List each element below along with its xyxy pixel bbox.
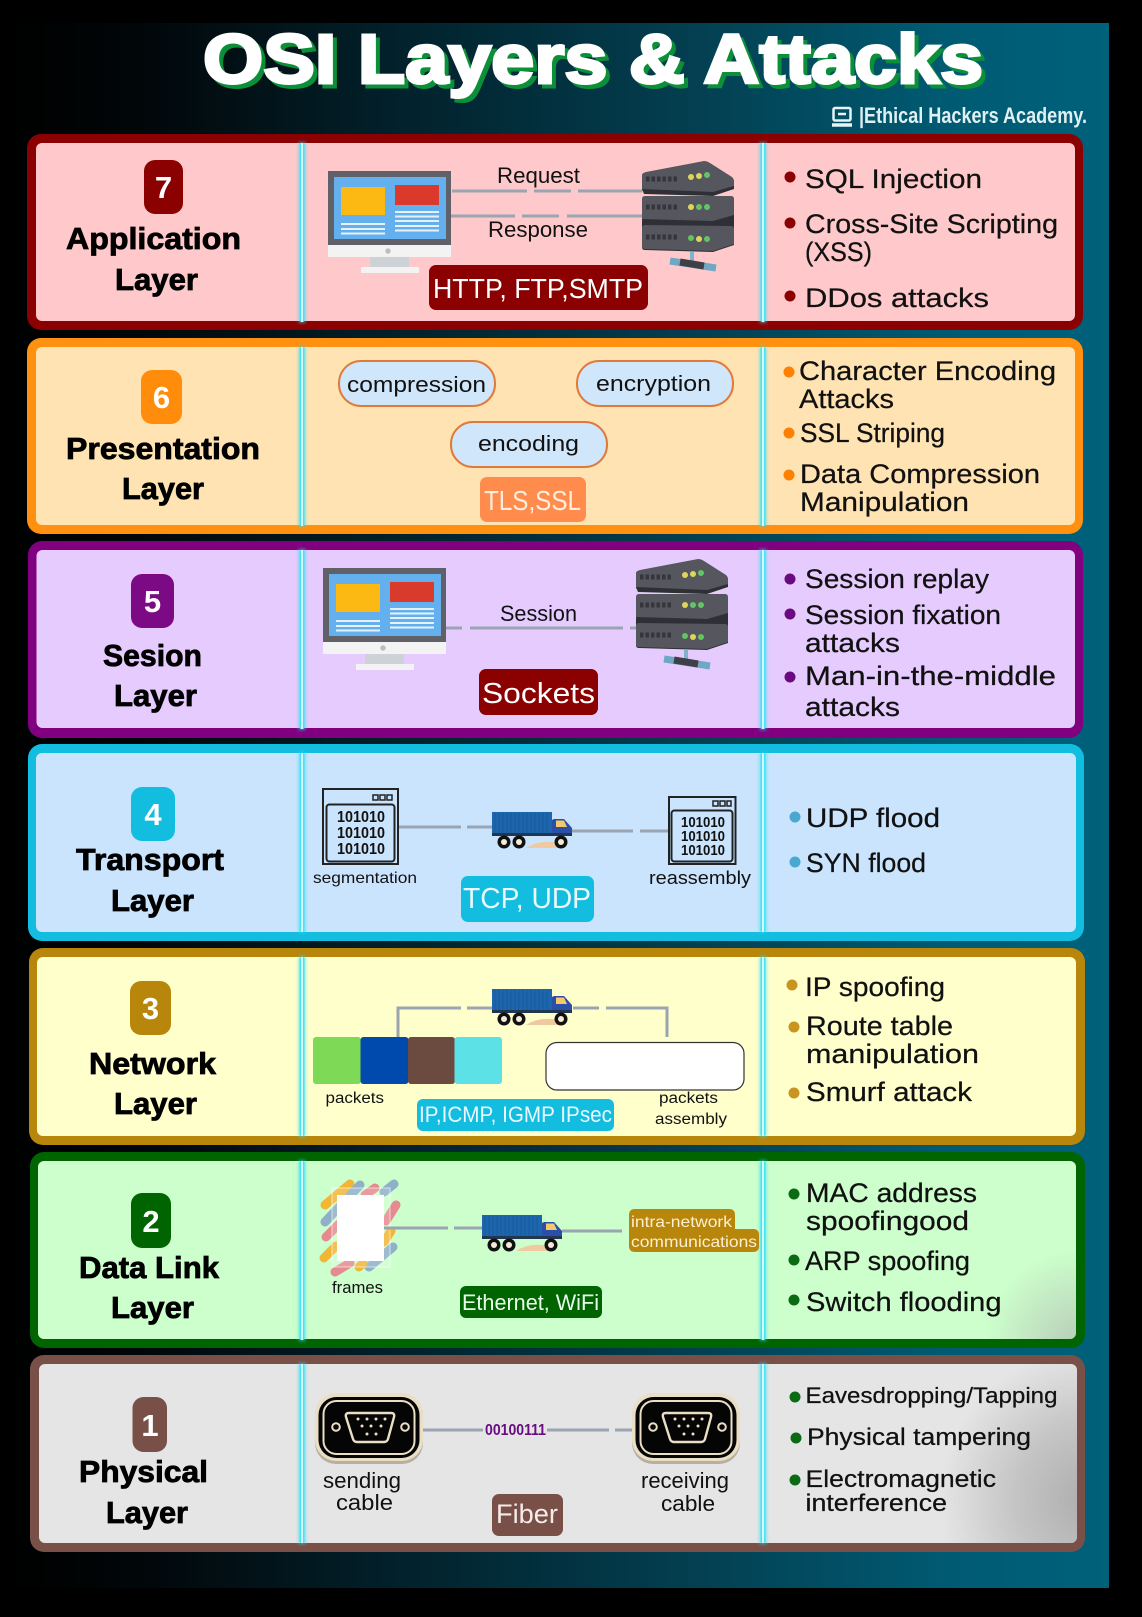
title: OSI Layers & Attacks <box>203 20 983 98</box>
intra-network tag: communications <box>631 1234 757 1251</box>
icon: laptop <box>832 108 852 125</box>
panel: layer 6 presentation <box>27 338 1083 534</box>
layer name: Layer <box>122 471 204 506</box>
layer name <box>89 1046 217 1121</box>
attacks list: SYN flood <box>806 848 926 878</box>
transport line <box>399 827 668 831</box>
attacks list: SQL Injection <box>805 164 982 194</box>
layer name <box>103 638 202 713</box>
attacks list: Route table <box>806 1011 953 1041</box>
badge 4 <box>131 787 175 841</box>
attacks list: DDos attacks <box>805 283 989 313</box>
panel body <box>36 143 1075 321</box>
panel: layer 2 data link <box>30 1152 1085 1348</box>
badge 6: 6 <box>153 380 170 415</box>
panel body <box>36 753 1076 932</box>
attacks list <box>784 564 1056 722</box>
attacks list: MAC address <box>806 1178 977 1208</box>
badge 3 <box>130 981 171 1035</box>
icon: monitor <box>328 171 451 273</box>
panel frame <box>30 1355 1085 1552</box>
diagram: data link <box>324 1184 759 1318</box>
frames label: frames <box>332 1279 383 1297</box>
panel: layer 4 transport <box>28 744 1084 941</box>
brand text: |Ethical Hackers Academy. <box>859 103 1087 128</box>
diagram: session <box>323 559 728 715</box>
layer name <box>79 1250 220 1325</box>
attacks list: Physical tampering <box>807 1424 1031 1451</box>
panel frame <box>27 338 1083 534</box>
attacks list: Electromagnetic <box>806 1466 996 1493</box>
attacks list: manipulation <box>806 1039 979 1069</box>
badge 5 <box>131 574 174 628</box>
bits label: 00100111 <box>485 1422 546 1439</box>
sending cable label <box>323 1468 401 1515</box>
icon: frames <box>324 1184 396 1272</box>
layer name: Layer <box>111 883 194 918</box>
icon: segmentation window: 101010 <box>337 825 385 842</box>
layer name: Transport <box>76 842 224 877</box>
protocol tag: Fiber <box>496 1499 558 1529</box>
icon: segmentation window <box>323 789 398 864</box>
attacks list: ARP spoofing <box>805 1246 970 1276</box>
panel body <box>39 1364 1077 1543</box>
routing line <box>398 1008 667 1037</box>
pill: compression: compression <box>347 372 486 397</box>
attacks list: Switch flooding <box>806 1287 1002 1317</box>
panel body <box>36 550 1075 728</box>
attacks list: Manipulation <box>800 487 969 517</box>
logo: Ethical Hackers Academy <box>832 103 1087 128</box>
icon: receiving connector <box>632 1393 740 1464</box>
link line <box>384 1228 622 1231</box>
packets <box>313 1037 502 1084</box>
attacks list: IP spoofing <box>805 972 945 1002</box>
icon: sending connector <box>315 1393 423 1464</box>
protocol tag: IP,ICMP, IGMP IPsec <box>419 1102 612 1127</box>
icon: truck <box>492 989 572 1026</box>
packets assembly box <box>546 1042 744 1090</box>
layer name <box>76 842 224 918</box>
icon: server <box>636 559 728 666</box>
badge 5: 5 <box>144 584 161 619</box>
diagram: transport <box>313 789 751 922</box>
protocol tag: Sockets <box>482 678 595 710</box>
protocol tag: HTTP, FTP,SMTP <box>433 273 643 304</box>
panel frame <box>30 1152 1085 1348</box>
icon: reassembly window: 101010 <box>681 814 725 831</box>
badge 1: 1 <box>141 1408 159 1443</box>
layer name: Layer <box>111 1290 194 1325</box>
response label: Response <box>488 217 588 242</box>
layer name: Application <box>66 221 241 256</box>
attacks list <box>784 356 1056 517</box>
panel frame <box>28 744 1084 941</box>
layer name <box>66 221 241 297</box>
icon: truck <box>492 812 572 848</box>
attacks list <box>786 972 979 1107</box>
protocol tag <box>480 477 586 522</box>
layer name <box>79 1454 208 1530</box>
protocol tag <box>492 1494 563 1536</box>
icon: segmentation window: 101010 <box>337 841 385 858</box>
protocol tag <box>479 669 598 715</box>
protocol tag: TLS,SSL <box>484 485 581 516</box>
attacks list: Cross-Site Scripting <box>805 209 1058 239</box>
pill: compression <box>339 361 495 406</box>
attacks list: Eavesdropping/Tapping <box>806 1383 1058 1408</box>
intra-network tag <box>629 1209 759 1252</box>
sending cable label: sending <box>323 1468 401 1493</box>
attacks list: Smurf attack <box>806 1077 973 1107</box>
attacks list: Attacks <box>799 384 894 414</box>
layer name: Layer <box>115 262 198 297</box>
diagram: physical <box>315 1393 740 1536</box>
diagram: network <box>313 989 744 1131</box>
packets assembly label: packets <box>659 1090 718 1107</box>
badge 4: 4 <box>144 797 162 832</box>
packets label: packets <box>326 1090 384 1107</box>
panel: layer 5 session <box>28 541 1083 738</box>
attacks list: Character Encoding <box>799 356 1056 386</box>
layer name: Layer <box>114 1086 197 1121</box>
protocol tag <box>461 876 594 922</box>
panel body <box>37 957 1076 1136</box>
panel frame <box>29 948 1085 1145</box>
badge 6 <box>141 370 182 424</box>
attacks list <box>788 1178 1002 1317</box>
badge 1 <box>132 1397 167 1452</box>
receiving cable label: cable <box>661 1491 715 1516</box>
badge 2: 2 <box>142 1204 160 1239</box>
attacks list: Man-in-the-middle <box>805 661 1056 691</box>
receiving cable label <box>641 1468 729 1516</box>
request and response lines <box>451 191 642 216</box>
attacks list <box>790 1383 1058 1517</box>
layer name: Sesion <box>103 638 202 673</box>
sending cable label: cable <box>336 1490 393 1515</box>
attacks list: spoofingood <box>806 1206 969 1236</box>
protocol tag: Ethernet, WiFi <box>462 1290 599 1315</box>
attacks list <box>784 164 1058 313</box>
panel: layer 7 application <box>27 134 1083 330</box>
attacks list: Session replay <box>805 564 990 594</box>
icon: monitor <box>323 568 446 670</box>
icon: server <box>642 161 734 268</box>
reassembly label: reassembly <box>649 868 751 888</box>
panel: layer 3 network <box>29 948 1085 1145</box>
attacks list: (XSS) <box>805 237 872 267</box>
layer name: Layer <box>114 678 197 713</box>
packets assembly label: assembly <box>655 1111 727 1128</box>
request label: Request <box>497 163 580 188</box>
icon: truck <box>482 1215 562 1252</box>
layer name: Physical <box>79 1454 208 1489</box>
layer name <box>66 431 260 506</box>
attacks list: interference <box>806 1490 947 1517</box>
session label: Session <box>500 601 577 626</box>
layer name: Network <box>89 1046 217 1081</box>
attacks list: attacks <box>805 692 900 722</box>
panel body <box>36 347 1075 525</box>
pill: encryption: encryption <box>596 371 711 396</box>
intra-network tag: intra-network <box>631 1214 733 1231</box>
attacks list: Session fixation <box>805 600 1001 630</box>
panel body <box>38 1161 1076 1339</box>
protocol tag <box>429 265 648 310</box>
badge 2 <box>131 1193 171 1248</box>
icon: reassembly window: 101010 <box>681 842 725 859</box>
segmentation label: segmentation <box>313 870 417 887</box>
pill: encoding: encoding <box>478 431 579 456</box>
pill: encoding <box>451 422 607 467</box>
panel frame <box>27 134 1083 330</box>
icon: reassembly window: 101010 <box>681 828 725 845</box>
badge 7: 7 <box>155 170 172 205</box>
attacks list: attacks <box>805 628 900 658</box>
corner shading <box>930 1364 1077 1543</box>
attacks list <box>790 803 940 878</box>
pill: encryption <box>577 361 733 406</box>
protocol tag: TCP, UDP <box>463 883 591 915</box>
diagram: request and response <box>328 161 734 310</box>
diagram: functions <box>339 361 733 522</box>
icon: reassembly window <box>669 797 736 864</box>
layer name: Data Link <box>79 1250 220 1285</box>
panel frame <box>28 541 1083 738</box>
badge 3: 3 <box>142 991 159 1026</box>
icon: segmentation window: 101010 <box>337 809 385 826</box>
attacks list: Data Compression <box>800 459 1040 489</box>
corner shading <box>970 1245 1076 1339</box>
cable line <box>423 1428 632 1432</box>
layer name: Layer <box>106 1495 188 1530</box>
badge 7 <box>144 160 183 214</box>
receiving cable label: receiving <box>641 1468 729 1493</box>
attacks list: UDP flood <box>806 803 940 833</box>
packets assembly label <box>655 1090 727 1128</box>
panel: layer 1 physical <box>30 1355 1085 1552</box>
attacks list: SSL Striping <box>800 418 945 448</box>
session line <box>446 626 641 630</box>
layer name: Presentation <box>66 431 260 466</box>
